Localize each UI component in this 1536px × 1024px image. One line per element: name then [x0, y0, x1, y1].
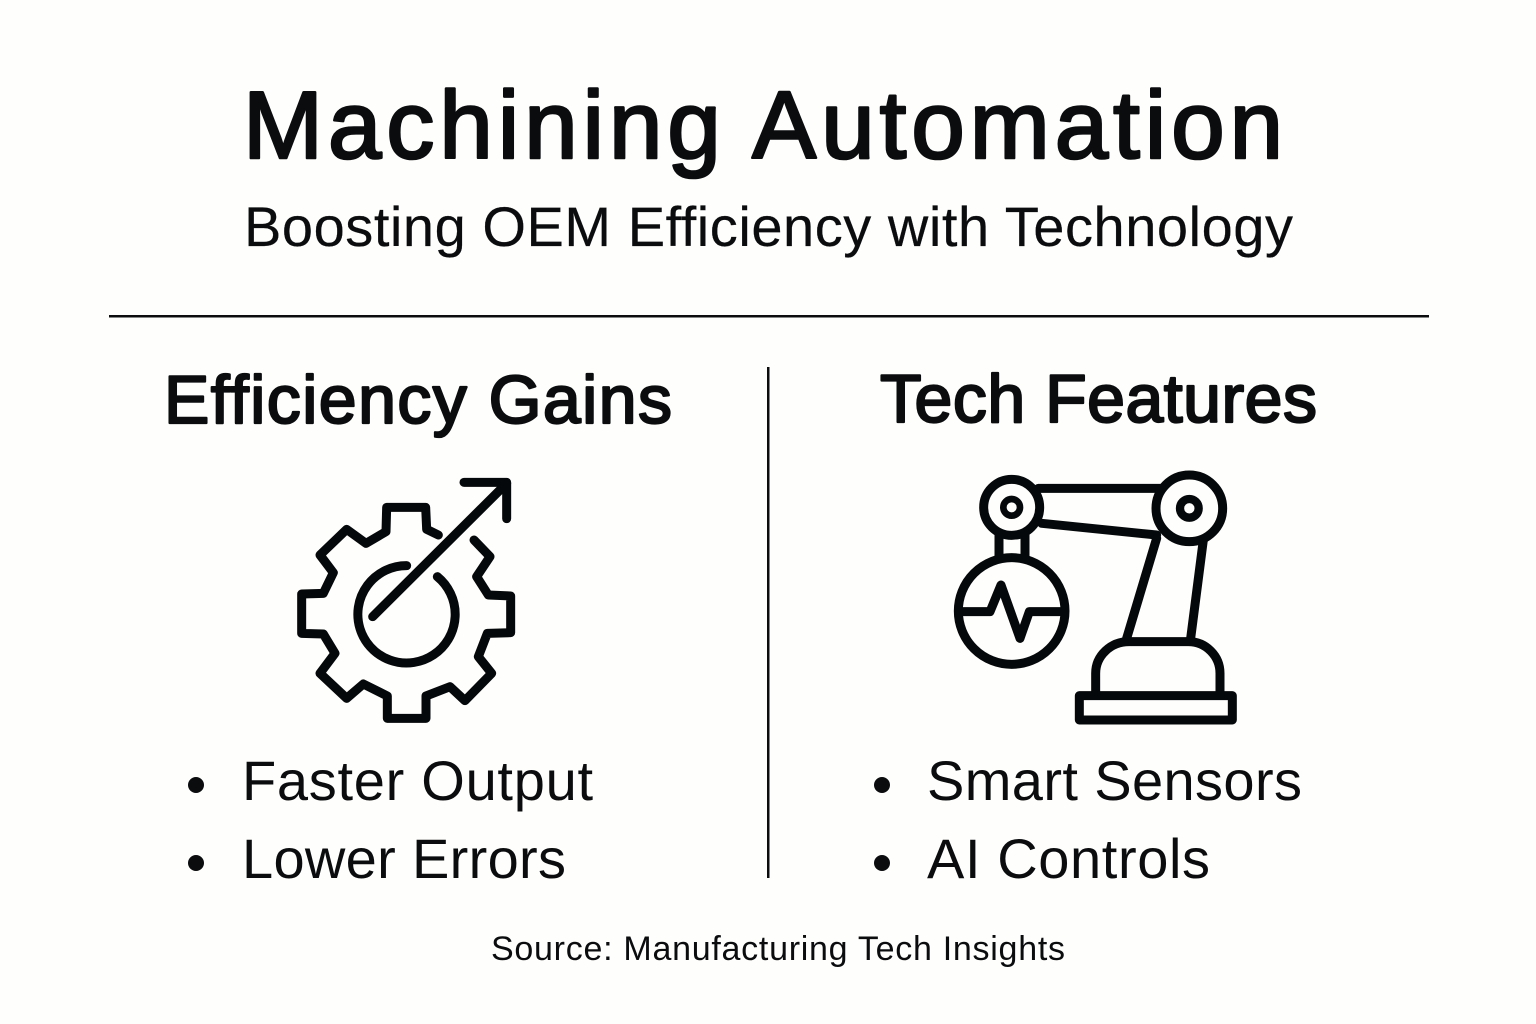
bullet list: tech features: AI Controls — [927, 827, 1210, 890]
icon: robot arm with pulse gauge — [958, 475, 1232, 720]
title: Machining Automation — [243, 72, 1283, 179]
heading: efficiency gains: Efficiency Gains — [164, 362, 672, 438]
bullet list: efficiency gains: Faster Output — [242, 749, 593, 812]
panel: efficiency gains — [164, 362, 672, 890]
icon: gear with upward arrow — [302, 482, 511, 718]
heading: tech features: Tech Features — [880, 361, 1317, 437]
panel: tech features — [874, 361, 1317, 890]
subtitle: Boosting OEM Efficiency with Technology — [244, 195, 1293, 258]
bullet list: tech features: Smart Sensors — [927, 749, 1302, 812]
source note: Source: Manufacturing Tech Insights — [491, 930, 1065, 968]
bullet list: efficiency gains — [188, 749, 593, 890]
bullet list: tech features — [874, 749, 1302, 890]
bullet list: efficiency gains: Lower Errors — [242, 827, 566, 890]
